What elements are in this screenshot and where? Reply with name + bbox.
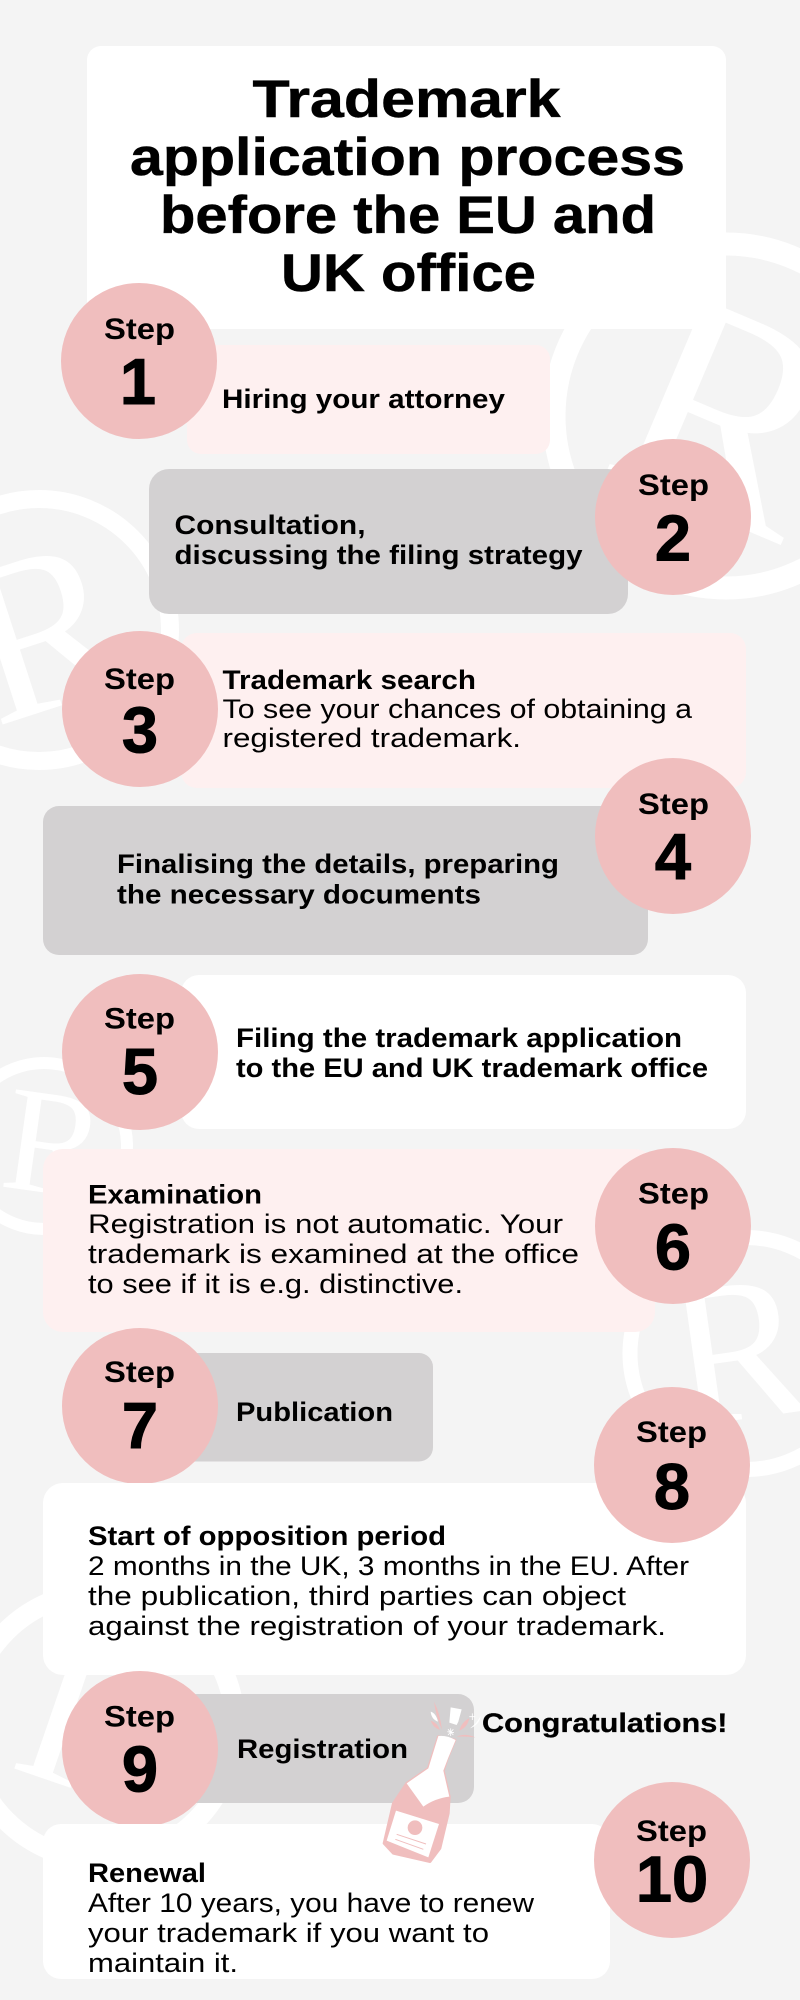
title: before the EU and [160,186,656,245]
panel: step 6: Step [638,1178,709,1210]
panel: step 3 [62,631,746,788]
panel: step 3: Trademark search [222,665,476,695]
panel: step 5: Filing the trademark application [236,1023,682,1053]
panel: step 7 [62,1328,433,1484]
panel: step 3: To see your chances of obtaining a [222,694,693,724]
panel: step 4 [43,758,751,955]
panel: step 2: Step [638,469,709,502]
panel: step 6: trademark is examined at the office [88,1239,579,1269]
panel: step 4: 4 [655,820,691,893]
panel: step 10: 10 [636,1842,708,1916]
title: application process [130,128,685,187]
panel: step 2: Consultation, [174,510,366,540]
panel: step 4: Step [638,788,709,821]
panel: step 3: Step [104,663,175,696]
panel: step 10: After 10 years, you have to renew [88,1888,535,1918]
panel: step 6: Examination [88,1180,262,1210]
panel: step 8: 2 months in the UK, 3 months in the EU. After [88,1551,689,1581]
panel: step 9: Registration [237,1734,408,1764]
congratulations text: Congratulations! [482,1708,728,1738]
panel: step 3: registered trademark. [222,723,521,753]
title: Trademark [252,70,561,129]
panel: step 10: Renewal [88,1858,206,1888]
panel: step 1: Hiring your attorney [222,384,505,414]
title panel [87,46,726,329]
panel: step 2: discussing the filing strategy [174,540,582,570]
icon: champagne bottle [384,1702,481,1862]
panel: step 1: 1 [120,345,156,418]
panel: step 1: Step [104,313,175,346]
panel: step 8 [43,1387,750,1675]
panel: step 8: against the registration of your trademark. [88,1611,666,1641]
panel: step 9 [62,1671,474,1827]
panel: step 2 [149,439,751,614]
panel: step 2: 2 [655,502,691,574]
panel: step 10: Step [636,1815,707,1848]
panel: step 8: Step [636,1416,707,1449]
panel: step 9: 9 [122,1732,158,1806]
panel: step 5: 5 [122,1035,158,1108]
panel: step 5: Step [104,1002,175,1036]
panel: step 7: 7 [122,1389,158,1462]
title [130,70,685,303]
panel: step 4: the necessary documents [117,880,481,910]
panel: step 9: Step [104,1700,175,1734]
panel: step 3: 3 [122,694,158,766]
panel: step 8: the publication, third parties can object [88,1581,627,1611]
panel: step 1 [61,283,550,454]
panel: step 5 [62,974,746,1130]
panel: step 8: 8 [654,1450,690,1523]
panel: step 10: maintain it. [88,1948,238,1978]
panel: step 8: Start of opposition period [88,1521,446,1551]
panel: step 6: 6 [655,1210,691,1284]
panel: step 7: Publication [236,1397,393,1427]
panel: step 6: to see if it is e.g. distinctive. [88,1269,463,1299]
panel: step 5: to the EU and UK trademark office [236,1053,708,1083]
title: UK office [281,244,536,303]
panel: step 4: Finalising the details, preparing [117,849,559,879]
panel: step 7: Step [104,1356,175,1389]
panel: step 10 [43,1782,750,1979]
panel: step 6 [43,1148,751,1332]
panel: step 6: Registration is not automatic. Your [88,1209,563,1239]
panel: step 10: your trademark if you want to [88,1918,489,1948]
